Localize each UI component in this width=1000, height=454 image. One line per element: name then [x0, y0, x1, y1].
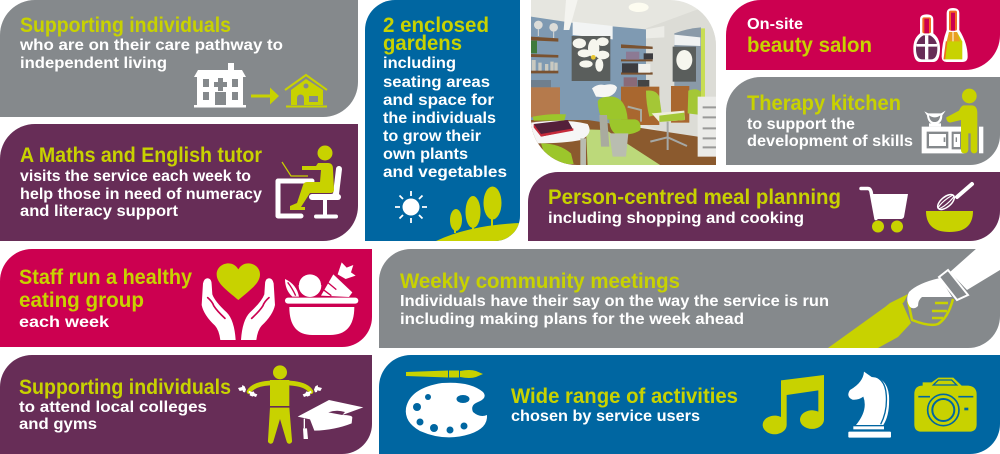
icon: music note	[763, 375, 824, 434]
icon: shopping cart	[861, 188, 908, 232]
icon: man lifting weights	[238, 365, 363, 444]
text block: care pathway	[19, 37, 283, 72]
panel: colleges and gyms	[0, 355, 372, 454]
icon: salad bowl	[285, 262, 358, 335]
icon: person cooking	[922, 89, 983, 153]
heading: beauty salon: beauty salon	[747, 34, 872, 57]
text block: gardens: and space for	[383, 92, 494, 109]
panel: meal planning	[528, 172, 1000, 241]
icon: student at desk	[278, 146, 341, 216]
heading: enclosed gardens	[383, 14, 489, 55]
icon: sun	[395, 191, 427, 223]
heading: enclosed gardens: gardens	[383, 32, 462, 55]
text block: colleges and gyms: and gyms	[19, 416, 97, 433]
icon: handshake	[828, 248, 1000, 348]
photo: beauty salon interior	[531, 0, 718, 167]
icon: trees on hill	[436, 186, 520, 241]
text block: care pathway: independent living	[20, 55, 167, 72]
icon: hospital	[194, 63, 246, 108]
text block: on-site: On-site	[747, 16, 803, 33]
icon: home	[285, 75, 327, 108]
text block: meetings	[400, 293, 829, 328]
panel: therapy kitchen	[726, 77, 1000, 165]
text block: gardens: and vegetables	[383, 164, 507, 181]
text block: kitchen: to support the	[747, 116, 855, 133]
heading: healthy eating group	[19, 266, 192, 312]
panel: activities	[379, 355, 1000, 454]
icon: chess knight	[848, 372, 891, 438]
panel: community meetings	[379, 248, 1000, 348]
text block: gardens: to grow their	[383, 128, 481, 145]
text block: gardens	[383, 55, 507, 181]
text block: gardens: own plants	[383, 146, 468, 163]
text block: gardens: the individuals	[383, 110, 496, 127]
text block: tutor	[20, 168, 262, 220]
text block: gardens: seating areas	[383, 74, 490, 91]
panel: beauty salon	[726, 0, 1000, 70]
heading: supporting individuals: Supporting individuals	[20, 14, 231, 37]
heading: healthy eating group: Staff run a healthy	[19, 266, 192, 289]
heading: weekly community meetings: Weekly community meetings	[400, 270, 680, 293]
text block: colleges and gyms: to attend local colleges	[19, 399, 207, 416]
arrow: hospital to home	[251, 88, 279, 104]
text block: tutor: help those in need of numeracy	[20, 186, 262, 203]
text block: meal planning: including shopping and cooking	[548, 210, 804, 227]
panel: care pathway	[0, 0, 358, 117]
text block: tutor: and literacy support	[20, 203, 179, 220]
text block: care pathway: who are on their care pathway to	[19, 37, 283, 54]
icon: palette	[406, 383, 487, 437]
heading: wide range of activities: Wide range of activities	[511, 385, 738, 408]
icon: camera	[914, 378, 977, 432]
text block: tutor: visits the service each week to	[20, 168, 251, 185]
text block: each week: each week	[19, 314, 109, 331]
text block: colleges and gyms	[19, 399, 207, 433]
panel: enclosed gardens	[365, 0, 520, 241]
heading: person-centred meal planning: Person-centred meal planning	[548, 186, 841, 209]
text block: activities: chosen by service users	[511, 408, 700, 425]
heading: therapy kitchen: Therapy kitchen	[747, 92, 901, 115]
heading: healthy eating group: eating group	[19, 289, 144, 312]
heading: enclosed gardens: 2 enclosed	[383, 14, 489, 37]
icon: paintbrush	[406, 370, 483, 378]
panel: healthy eating	[0, 249, 372, 347]
text block: gardens: including	[383, 55, 456, 72]
icon: whisk and bowl	[926, 184, 973, 232]
text block: kitchen: development of skills	[747, 133, 913, 150]
text block: meetings: Individuals have their say on the way the service is run	[400, 293, 829, 310]
text block: meetings: including making plans for the week ahead	[400, 311, 744, 328]
heading: supporting individuals: Supporting individuals	[19, 376, 231, 399]
panel: tutor	[0, 124, 358, 241]
icon: nail polish bottles	[913, 8, 968, 62]
text block: kitchen	[747, 116, 913, 150]
icon: heart in hands	[202, 263, 275, 340]
heading: maths and english tutor: A Maths and English tutor	[20, 144, 262, 167]
